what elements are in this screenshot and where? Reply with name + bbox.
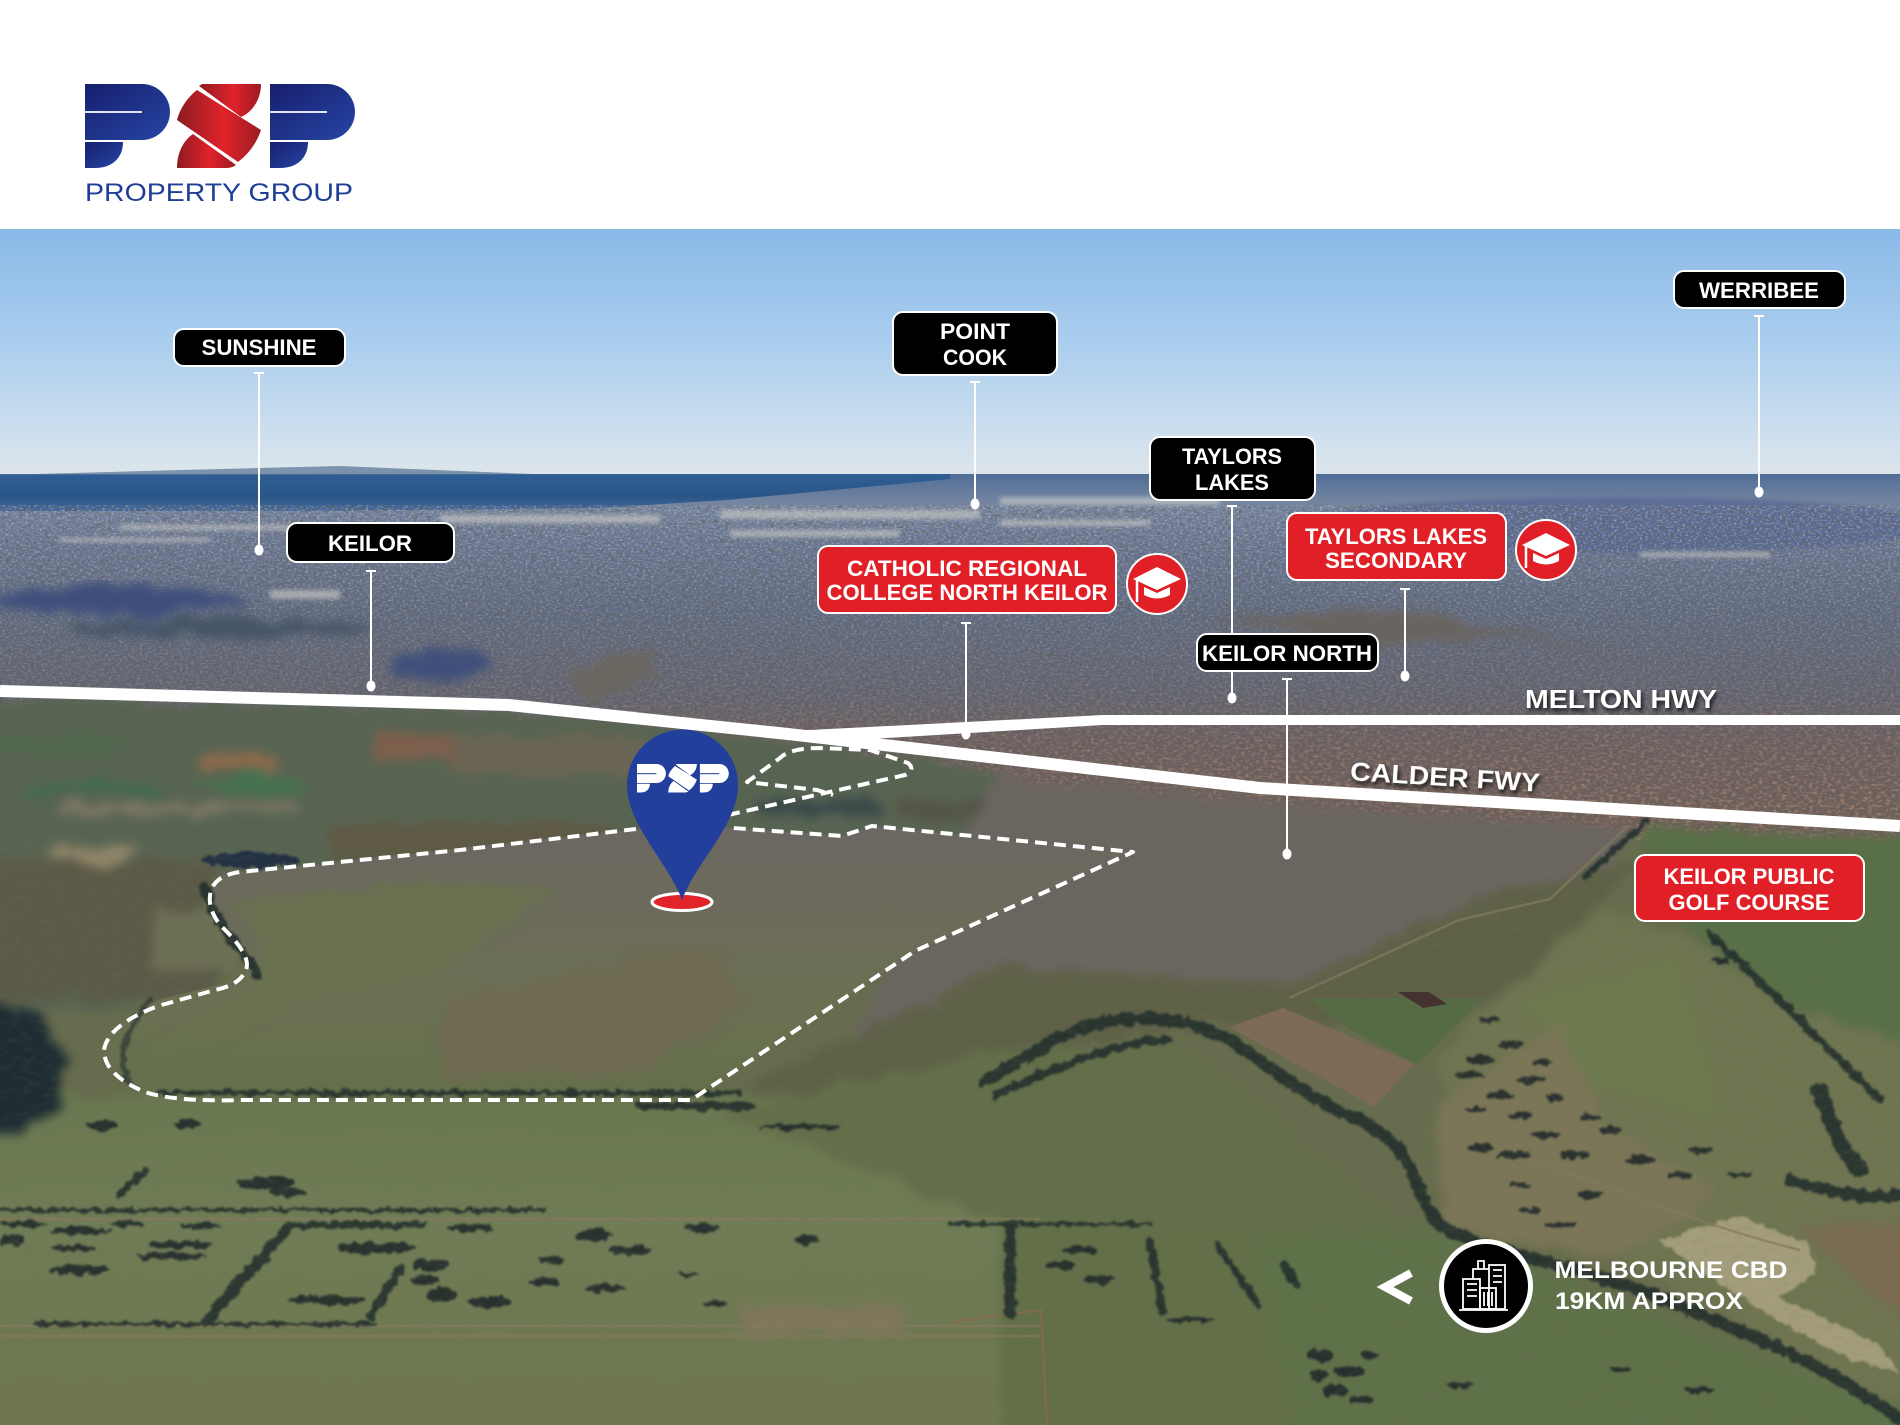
light urban streaks [60,497,1770,599]
leader: Werribee [1754,316,1764,498]
logo mark: first P [85,84,170,168]
cliff [1659,1216,1900,1372]
sky [0,229,1900,479]
label: Catholic Regional College North Keilor: CATHOLIC REGIONAL [847,556,1087,581]
lower fields [0,1095,1060,1425]
label: Keilor [287,523,454,562]
suburbs [0,474,1900,860]
leader: Keilor North [1282,679,1292,860]
label: Point Cook: COOK [943,345,1007,370]
estate land [107,826,1133,1100]
label: Taylors Lakes [1150,437,1315,500]
label: Taylors Lakes Secondary: TAYLORS LAKES [1305,524,1487,549]
Melbourne CBD direction arrow [1385,1273,1411,1301]
estate boundary dashed outline [104,748,1133,1100]
pin base ellipse [652,894,712,910]
map pin marker [627,730,738,910]
Melton Highway road [790,715,1900,742]
label: Catholic Regional College North Keilor: COLLEGE NORTH KEILOR [826,580,1108,605]
logo: PSP Property Group [85,84,355,207]
hills east [1430,910,1900,1425]
suburb texture: dark mottling [0,505,1900,835]
ground base layer [0,720,1900,1425]
label: Keilor: KEILOR [328,531,412,556]
icon: graduation cap, Catholic Regional College [1127,554,1187,614]
crop patch [1398,992,1447,1008]
tree belts and scattered trees [0,821,1900,1420]
brown area in estate [440,950,760,1080]
suburb texture: orange roofs [0,630,1900,840]
label: Taylors Lakes Secondary: SECONDARY [1325,548,1467,573]
distant headland [36,466,533,474]
label: Catholic Regional College North Keilor [818,546,1116,613]
Calder Freeway road [0,691,1900,826]
pin body [627,730,738,900]
gully at left edge [0,1000,65,1135]
bay [0,474,950,511]
Melbourne CBD distance text: 19KM APPROX [1555,1288,1744,1315]
label: Taylors Lakes: LAKES [1195,470,1269,495]
icon: graduation cap, Taylors Lakes Secondary [1516,520,1576,580]
label: Point Cook [893,312,1057,375]
label: Keilor Public Golf Course: GOLF COURSE [1668,890,1830,915]
suburb texture: light roofs [0,505,1900,787]
ploughed field [1229,1008,1414,1107]
leader: Taylors Lakes [1227,506,1237,704]
dirt tracks [0,825,1800,1425]
label: Keilor Public Golf Course: KEILOR PUBLIC [1664,864,1835,889]
golf course [1640,825,1900,1070]
paddock east of estate [820,775,1640,1090]
open land patches in suburbs [0,586,1620,700]
label: Werribee [1674,271,1845,308]
logo mark: S [177,84,261,168]
icon: Melbourne CBD buildings [1442,1242,1530,1330]
logo wordmark: PROPERTY GROUP [85,179,353,207]
dark gully blob north [202,852,298,868]
leader: Sunshine [254,373,264,556]
label: Keilor North [1197,634,1378,671]
Melbourne CBD distance text [1554,1257,1788,1315]
creek belts [0,821,1900,1420]
green field beside ploughed field [1308,998,1483,1064]
label: Keilor Public Golf Course [1635,855,1864,921]
texture: mottling over ground [0,835,1900,1425]
green area in estate [130,880,560,1060]
label: Sunshine [174,329,345,366]
leader: Catholic Regional College [961,623,971,740]
logo mark: second P [270,84,355,168]
rural land north of estate [0,696,1000,1010]
label: Point Cook: POINT [940,319,1011,344]
label: Taylors Lakes: TAYLORS [1182,444,1282,469]
label: Taylors Lakes Secondary [1287,513,1506,580]
blue far suburbs east [1300,497,1900,553]
label: Werribee: WERRIBEE [1699,278,1819,303]
label: Keilor North: KEILOR NORTH [1202,641,1372,666]
Melbourne CBD distance text: MELBOURNE CBD [1554,1257,1788,1284]
leader: Taylors Lakes Secondary [1400,589,1410,682]
leader: Point Cook [970,382,980,510]
road label: Melton Hwy: MELTON HWY [1525,684,1717,714]
pin logo [637,764,729,793]
road label: Calder Fwy: CALDER FWY [1349,756,1541,798]
leader: Keilor [366,571,376,692]
label: Sunshine: SUNSHINE [202,335,316,360]
